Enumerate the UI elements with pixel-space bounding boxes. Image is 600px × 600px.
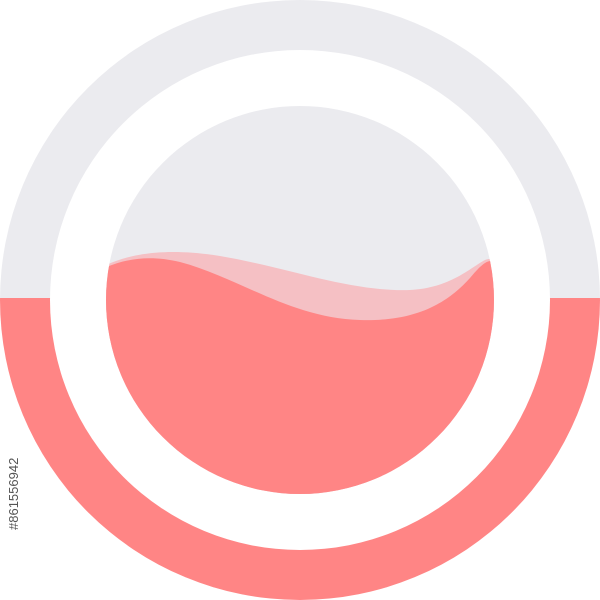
inner disk with wave <box>100 100 500 500</box>
white ring <box>50 50 550 550</box>
vertical id text: #861556942 <box>6 458 21 530</box>
dark wave layer <box>100 258 500 500</box>
light wave layer <box>100 252 500 500</box>
